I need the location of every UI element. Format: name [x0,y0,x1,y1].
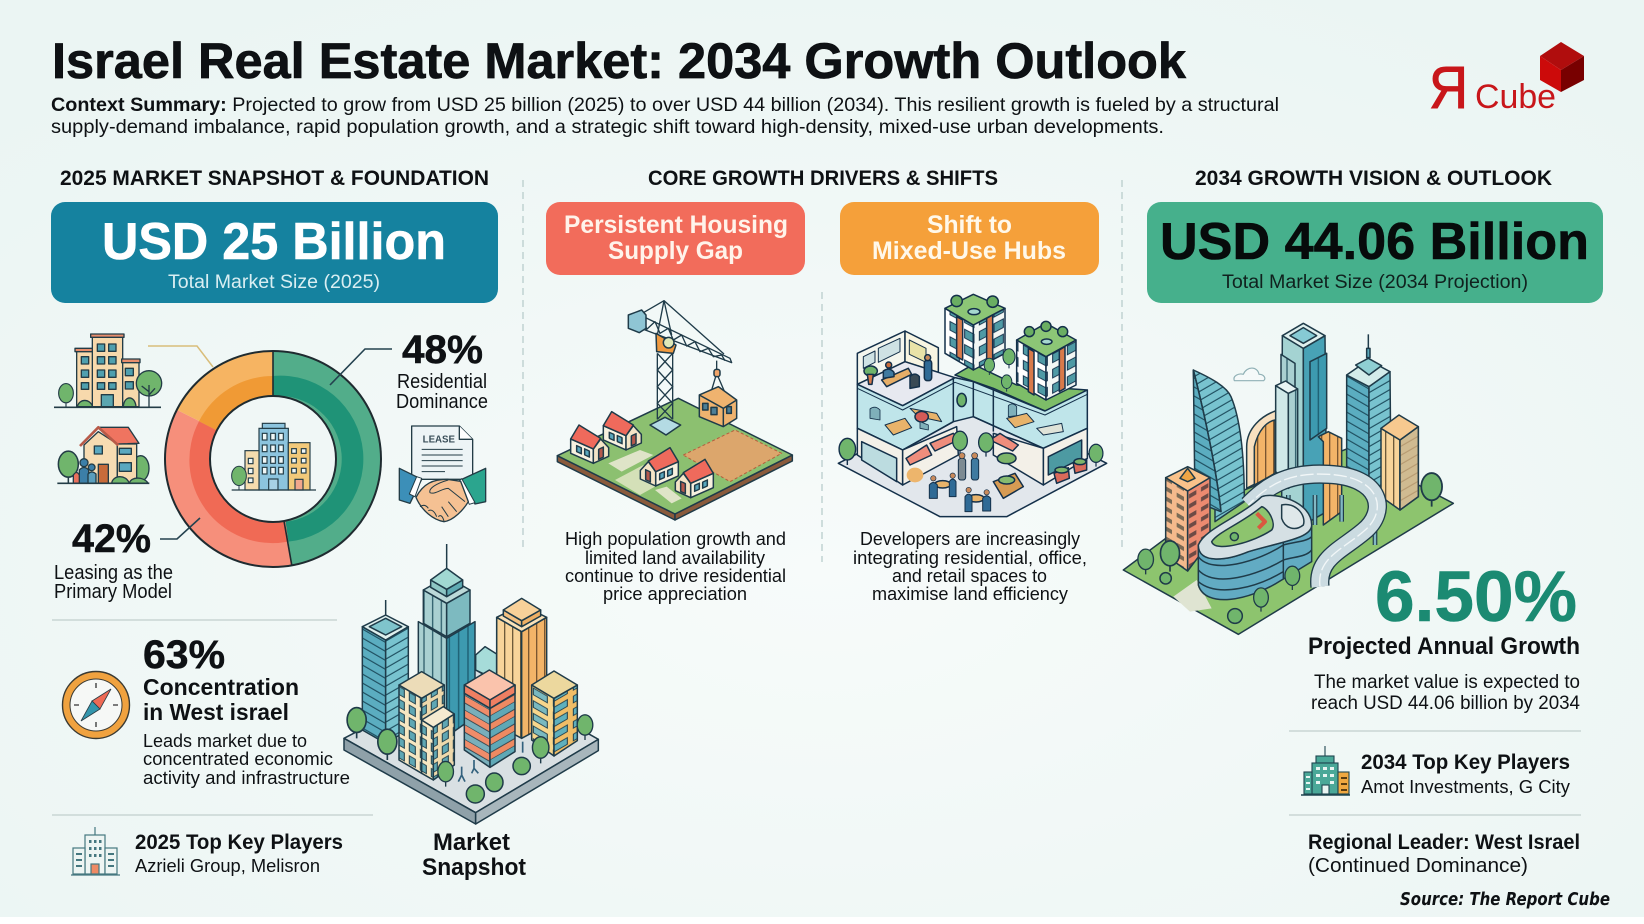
stat: 63% concentration [143,633,350,788]
card: shift to mixed-use hubs: Mixed-Use Hubs [872,237,1066,265]
stat: 63% concentration: Concentration [143,674,299,700]
panel: core growth drivers [546,166,1107,604]
stat: 63% concentration: concentrated economic [143,749,333,769]
callout: 42% leasing [54,517,200,603]
heading: core growth drivers: CORE GROWTH DRIVERS & SHIFTS [648,166,998,190]
text: 2034 top key players [1361,751,1571,797]
text: mixed-use description: integrating residential, office, [853,547,1087,568]
icon: compass [62,672,130,738]
illustration: market snapshot city [344,544,598,824]
title: Israel Real Estate Market: 2034 Growth Outlook [52,33,1186,89]
text: housing gap description: limited land availability [585,547,766,568]
callout line: orange segment [148,346,213,367]
road pillars [1288,495,1375,545]
stat: 6.50% projected growth: reach USD 44.06 billion by 2034 [1311,693,1580,714]
text: 2025 top key players: Azrieli Group, Melisron [135,855,320,876]
section dividers [523,180,1122,562]
text: housing gap description: continue to drive residential [565,565,786,586]
text: mixed-use description: and retail spaces to [892,565,1047,586]
stat card: USD 44.06 Billion: Total Market Size (2034 Projection) [1222,272,1528,293]
text: 2025 top key players [135,831,343,876]
icon: lease and handshake [399,426,486,522]
label: market snapshot [422,829,526,881]
callout: 42% leasing: Primary Model [54,581,172,603]
card: persistent housing supply gap: Supply Gap [608,237,743,265]
card: shift to mixed-use hubs: Shift to [927,211,1012,239]
text: mixed-use description: Developers are increasingly [860,528,1081,549]
road [1248,474,1377,587]
text: regional leader: (Continued Dominance) [1308,854,1528,877]
divider [1289,730,1581,732]
loop building [1198,495,1312,600]
chart: donut market share [165,351,381,567]
stat: 6.50% projected growth: The market value is expected to [1314,672,1580,693]
text: 2034 top key players: 2034 Top Key Players [1361,751,1570,774]
text: mixed-use description: maximise land efficiency [872,583,1069,604]
logo: RCube: Cube [1475,78,1556,116]
illustration: 2034 future city [1123,323,1453,634]
panel: 2034 growth vision [1123,166,1603,877]
label: market snapshot: Snapshot [422,854,526,881]
stat: 6.50% projected growth: 6.50% [1375,558,1577,637]
icon: family house [57,427,149,483]
text: regional leader [1308,831,1580,877]
context summary: Context Summary: Projected to grow from USD 25 billion (2025) to over USD 44 billion (2034). This resilient growth is fueled by a structural [51,94,1279,116]
icon: lease and handshake: LEASE [423,435,456,446]
text: mixed-use description [853,528,1087,604]
panel: 2025 market snapshot [51,166,598,881]
icon: donut centre building [232,423,316,490]
stat card: USD 25 Billion: Total Market Size (2025) [168,272,380,293]
text: housing gap description [565,528,786,604]
label: market snapshot: Market [433,829,510,856]
context summary [51,94,1279,138]
illustration: mixed-use hub [838,294,1107,517]
stat: 63% concentration: in West israel [143,699,289,725]
icon: 2034 key players building [1301,746,1350,795]
callout: 42% leasing: 42% [72,517,151,561]
stat: 6.50% projected growth [1308,558,1580,714]
divider [52,619,337,621]
logo: RCube: Я [1429,55,1468,121]
stat: 6.50% projected growth: Projected Annual Growth [1308,633,1580,660]
callout: 42% leasing: Leasing as the [54,562,173,584]
text: housing gap description: High population growth and [565,528,786,549]
card: persistent housing supply gap: Persistent Housing [564,211,788,239]
illustration: crane and houses [557,301,792,520]
icon: 2025 key players building [71,827,120,875]
stat card: USD 44.06 Billion: USD 44.06 Billion [1160,213,1589,271]
icon: office building with trees [54,334,162,407]
text: housing gap description: price appreciation [603,583,747,604]
callout: 48% residential: Dominance [396,391,488,413]
divider [1289,814,1581,816]
callout: 48% residential: 48% [402,328,483,372]
stat: 63% concentration: Leads market due to [143,731,307,751]
text: regional leader: Regional Leader: West Israel [1308,831,1580,854]
text: 2025 top key players: 2025 Top Key Players [135,831,343,854]
heading: 2034 vision: 2034 GROWTH VISION & OUTLOOK [1195,166,1552,190]
heading: 2025 snapshot: 2025 MARKET SNAPSHOT & FOUNDATION [60,166,489,190]
callout: 48% residential: Residential [397,371,487,393]
stat card: USD 25 Billion [51,202,498,303]
callout: 48% residential [330,328,488,413]
stat card: USD 44.06 Billion [1147,202,1603,303]
logo: RCube [1429,42,1584,121]
divider [52,814,373,816]
context summary: supply-demand imbalance, rapid population growth, and a strategic shift toward high-density, mixed-use urban developments. [51,116,1164,138]
stat: 63% concentration: 63% [143,633,225,677]
text: 2034 top key players: Amot Investments, G City [1361,776,1571,797]
card: shift to mixed-use hubs [840,202,1099,275]
stat card: USD 25 Billion: USD 25 Billion [102,213,446,271]
stat: 63% concentration: activity and infrastructure [143,768,350,788]
card: persistent housing supply gap [546,202,805,275]
